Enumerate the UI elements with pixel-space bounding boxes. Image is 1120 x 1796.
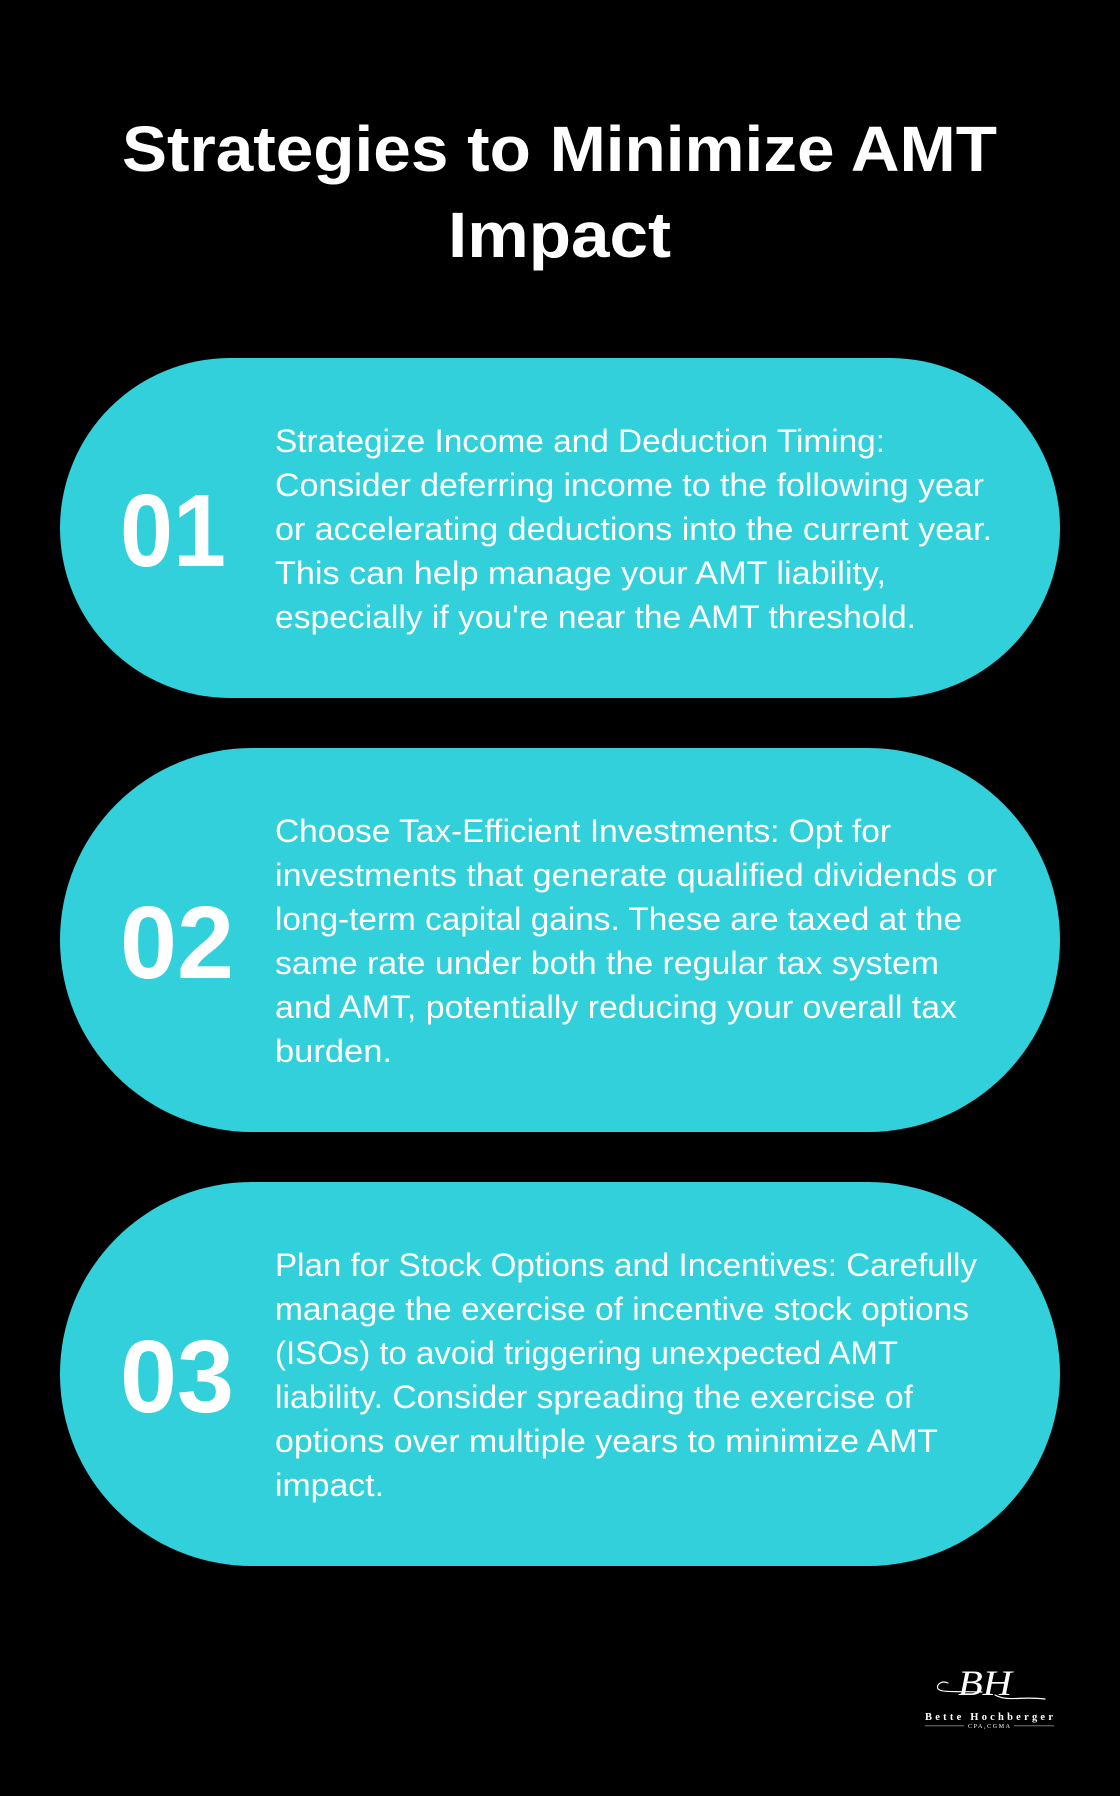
number 02: 02	[120, 885, 234, 1000]
body text 02: investments that generate qualified dividends or	[275, 857, 997, 893]
body text 03: options over multiple years to minimize AMT	[275, 1423, 938, 1459]
pill background 02	[60, 748, 1060, 1132]
body text 02: and AMT, potentially reducing your overall tax	[275, 989, 957, 1025]
body text 03: (ISOs) to avoid triggering unexpected AMT	[275, 1335, 898, 1371]
panel: strategy 02	[60, 748, 1060, 1132]
logo: Bette Hochberger signature	[925, 1663, 1054, 1730]
body text 02: burden.	[275, 1033, 392, 1069]
title: Impact	[448, 199, 671, 271]
body text 02: long-term capital gains. These are taxed at the	[275, 901, 962, 937]
title	[122, 113, 997, 271]
body text 02	[275, 813, 997, 1069]
body text 01	[275, 423, 992, 635]
body text 01: This can help manage your AMT liability,	[275, 555, 886, 591]
number 03: 03	[120, 1319, 234, 1434]
body text 03: Plan for Stock Options and Incentives: Carefully	[275, 1247, 977, 1283]
body text 01: especially if you're near the AMT threshold.	[275, 599, 916, 635]
logo credentials: CPA,CGMA	[968, 1724, 1011, 1730]
icon: signature flourish	[938, 1682, 1045, 1699]
body text 02: Choose Tax-Efficient Investments: Opt for	[275, 813, 891, 849]
body text 03: impact.	[275, 1467, 384, 1503]
body text 01: Consider deferring income to the following year	[275, 467, 984, 503]
body text 03: manage the exercise of incentive stock options	[275, 1291, 969, 1327]
panel: strategy 03	[60, 1182, 1060, 1566]
body text 03	[275, 1247, 977, 1503]
body text 01: Strategize Income and Deduction Timing:	[275, 423, 885, 459]
body text 02: same rate under both the regular tax system	[275, 945, 939, 981]
signature initials: BH	[958, 1663, 1014, 1703]
panel: strategy 01	[60, 358, 1060, 698]
pill background 03	[60, 1182, 1060, 1566]
number 01: 01	[120, 473, 226, 588]
body text 01: or accelerating deductions into the current year.	[275, 511, 992, 547]
title: Strategies to Minimize AMT	[122, 113, 997, 185]
logo name: Bette Hochberger	[925, 1712, 1053, 1723]
body text 03: liability. Consider spreading the exercise of	[275, 1379, 913, 1415]
pill background 01	[60, 358, 1060, 698]
